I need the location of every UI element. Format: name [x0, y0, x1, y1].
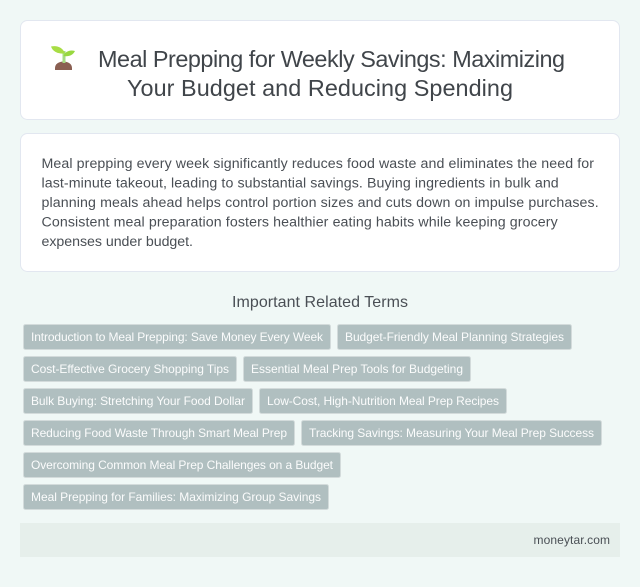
panel: summary text: last-minute takeout, leading to substantial savings. Buying ingredients in bulk and	[42, 176, 559, 192]
panel: title card	[20, 20, 620, 120]
tag	[24, 388, 252, 414]
tag: Introduction to Meal Prepping: Save Money Every Week	[31, 330, 324, 344]
title: Your Budget and Reducing Spending	[127, 75, 513, 101]
tag: Reducing Food Waste Through Smart Meal Prep	[31, 426, 287, 440]
footer: moneytar.com	[534, 533, 610, 547]
tag	[338, 324, 572, 350]
tag	[24, 356, 236, 382]
tag	[24, 452, 340, 478]
icon: sprout	[51, 46, 75, 70]
panel: summary text: Consistent meal preparation fosters healthier eating habits while keeping grocery	[42, 214, 559, 230]
tag: Bulk Buying: Stretching Your Food Dollar	[31, 394, 245, 408]
panel: summary text	[20, 134, 620, 272]
tag: Overcoming Common Meal Prep Challenges on a Budget	[31, 458, 334, 472]
title: Meal Prepping for Weekly Savings: Maximizing	[98, 46, 565, 72]
tag: Cost-Effective Grocery Shopping Tips	[31, 362, 229, 376]
tag: Budget-Friendly Meal Planning Strategies	[345, 330, 564, 344]
heading: important related terms: Important Related Terms	[232, 294, 408, 311]
panel: summary text: planning meals ahead helps control portion sizes and cuts down on impulse purchases.	[42, 195, 599, 211]
tag	[260, 388, 506, 414]
tag: Essential Meal Prep Tools for Budgeting	[251, 362, 463, 376]
tag	[302, 420, 602, 446]
tag list	[24, 324, 602, 510]
tag	[24, 324, 330, 350]
tag	[24, 484, 328, 510]
tag	[244, 356, 470, 382]
tag: Tracking Savings: Measuring Your Meal Prep Success	[309, 426, 594, 440]
tag: Low-Cost, High-Nutrition Meal Prep Recipes	[267, 394, 499, 408]
panel: summary text: expenses under budget.	[42, 234, 193, 250]
footer	[20, 523, 620, 557]
tag: Meal Prepping for Families: Maximizing Group Savings	[31, 490, 321, 504]
tag	[24, 420, 294, 446]
panel: summary text: Meal prepping every week significantly reduces food waste and eliminates the need for	[42, 156, 594, 172]
title	[98, 46, 565, 101]
